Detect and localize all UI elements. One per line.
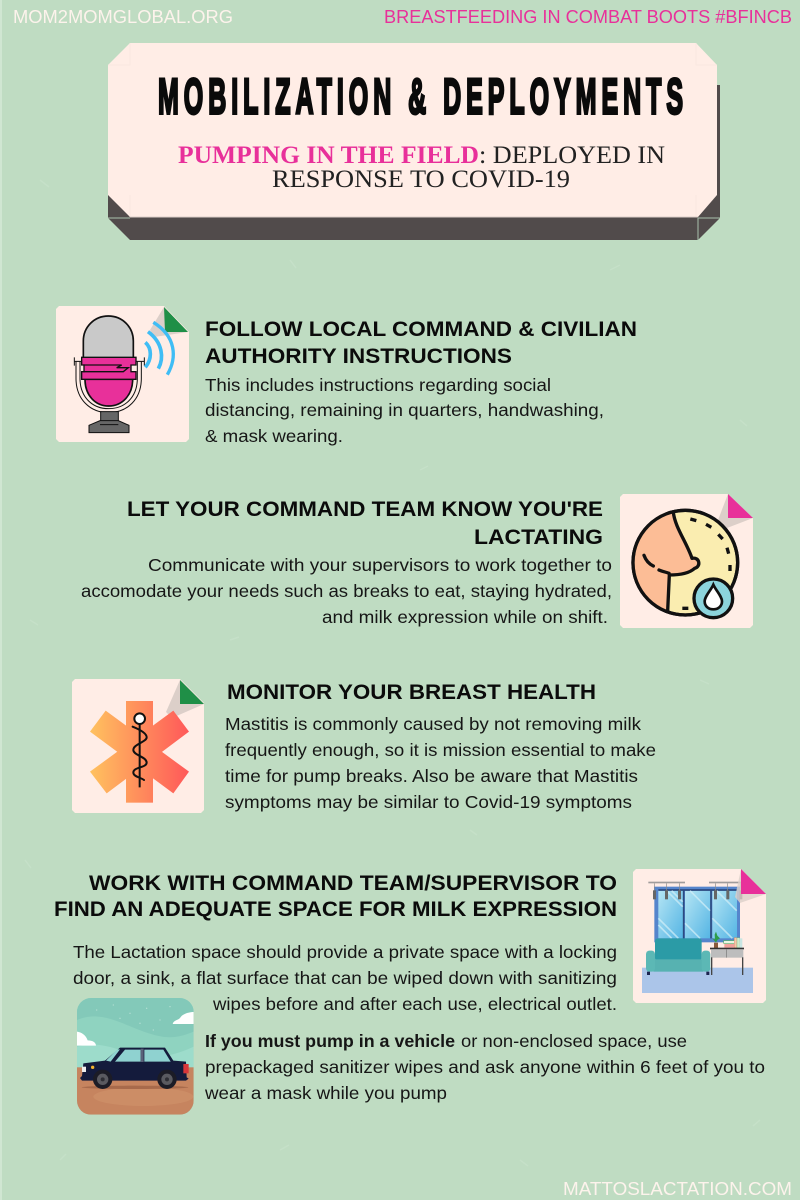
title banner	[108, 43, 720, 240]
vehicle pumping text	[204, 1031, 765, 1103]
subtitle	[178, 142, 665, 193]
subtitle: PUMPING IN THE FIELD	[178, 142, 479, 169]
body text: Mastitis is commonly caused by not removing milk	[225, 714, 641, 734]
icon: room with window and couch	[633, 869, 766, 1003]
icon: breast with milk drop	[620, 494, 753, 628]
heading	[54, 871, 617, 921]
heading: LET YOUR COMMAND TEAM KNOW YOU'RE	[127, 497, 603, 521]
vehicle pumping text: prepackaged sanitizer wipes and ask anyone within 6 feet of you to	[205, 1057, 765, 1077]
top right campaign label: BREASTFEEDING IN COMBAT BOOTS #BFINCB	[384, 6, 792, 27]
heading	[127, 497, 603, 549]
heading	[205, 317, 637, 368]
body text: time for pump breaks. Also be aware that Mastitis	[225, 766, 638, 786]
body text: accomodate your needs such as breaks to eat, staying hydrated,	[81, 581, 612, 601]
body text: door, a sink, a flat surface that can be wiped down with sanitizing	[73, 968, 617, 988]
panel: milk expression space	[54, 869, 766, 1115]
heading: FOLLOW LOCAL COMMAND & CIVILIAN	[205, 317, 637, 341]
body text: distancing, remaining in quarters, handwashing,	[205, 400, 604, 420]
body text	[205, 375, 604, 446]
icon: car in desert	[77, 998, 194, 1115]
icon: microphone wearing mask	[56, 306, 189, 442]
body text: wipes before and after each use, electrical outlet.	[212, 994, 617, 1014]
body text: symptoms may be similar to Covid-19 symptoms	[225, 792, 632, 812]
body text: This includes instructions regarding social	[205, 375, 551, 395]
heading: FIND AN ADEQUATE SPACE FOR MILK EXPRESSION	[54, 897, 617, 921]
subtitle: : DEPLOYED IN	[479, 142, 665, 169]
heading: AUTHORITY INSTRUCTIONS	[205, 344, 512, 368]
body text: frequently enough, so it is mission essential to make	[225, 740, 656, 760]
vehicle pumping text: wear a mask while you pump	[204, 1083, 447, 1103]
body text	[73, 942, 617, 1014]
body text	[225, 714, 656, 812]
vehicle pumping text: If you must pump in a vehicle	[205, 1031, 455, 1051]
body text: and milk expression while on shift.	[322, 607, 608, 627]
body text: The Lactation space should provide a private space with a locking	[73, 942, 617, 962]
top left site label: MOM2MOMGLOBAL.ORG	[13, 6, 233, 27]
heading: LACTATING	[474, 525, 603, 549]
footer site label: MATTOSLACTATION.COM	[563, 1178, 792, 1199]
panel: tell command team	[81, 494, 753, 628]
subtitle: RESPONSE TO COVID-19	[272, 166, 570, 193]
vehicle pumping text: or non-enclosed space, use	[461, 1031, 687, 1051]
icon: medical star of life	[72, 679, 204, 813]
panel: local command instructions	[56, 306, 637, 446]
body text	[81, 555, 612, 627]
panel: breast health	[72, 679, 656, 813]
title: MOBILIZATION & DEPLOYMENTS	[158, 69, 683, 125]
heading: MONITOR YOUR BREAST HEALTH	[227, 680, 596, 704]
body text: & mask wearing.	[205, 426, 343, 446]
heading: WORK WITH COMMAND TEAM/SUPERVISOR TO	[89, 871, 617, 895]
body text: Communicate with your supervisors to work together to	[148, 555, 612, 575]
